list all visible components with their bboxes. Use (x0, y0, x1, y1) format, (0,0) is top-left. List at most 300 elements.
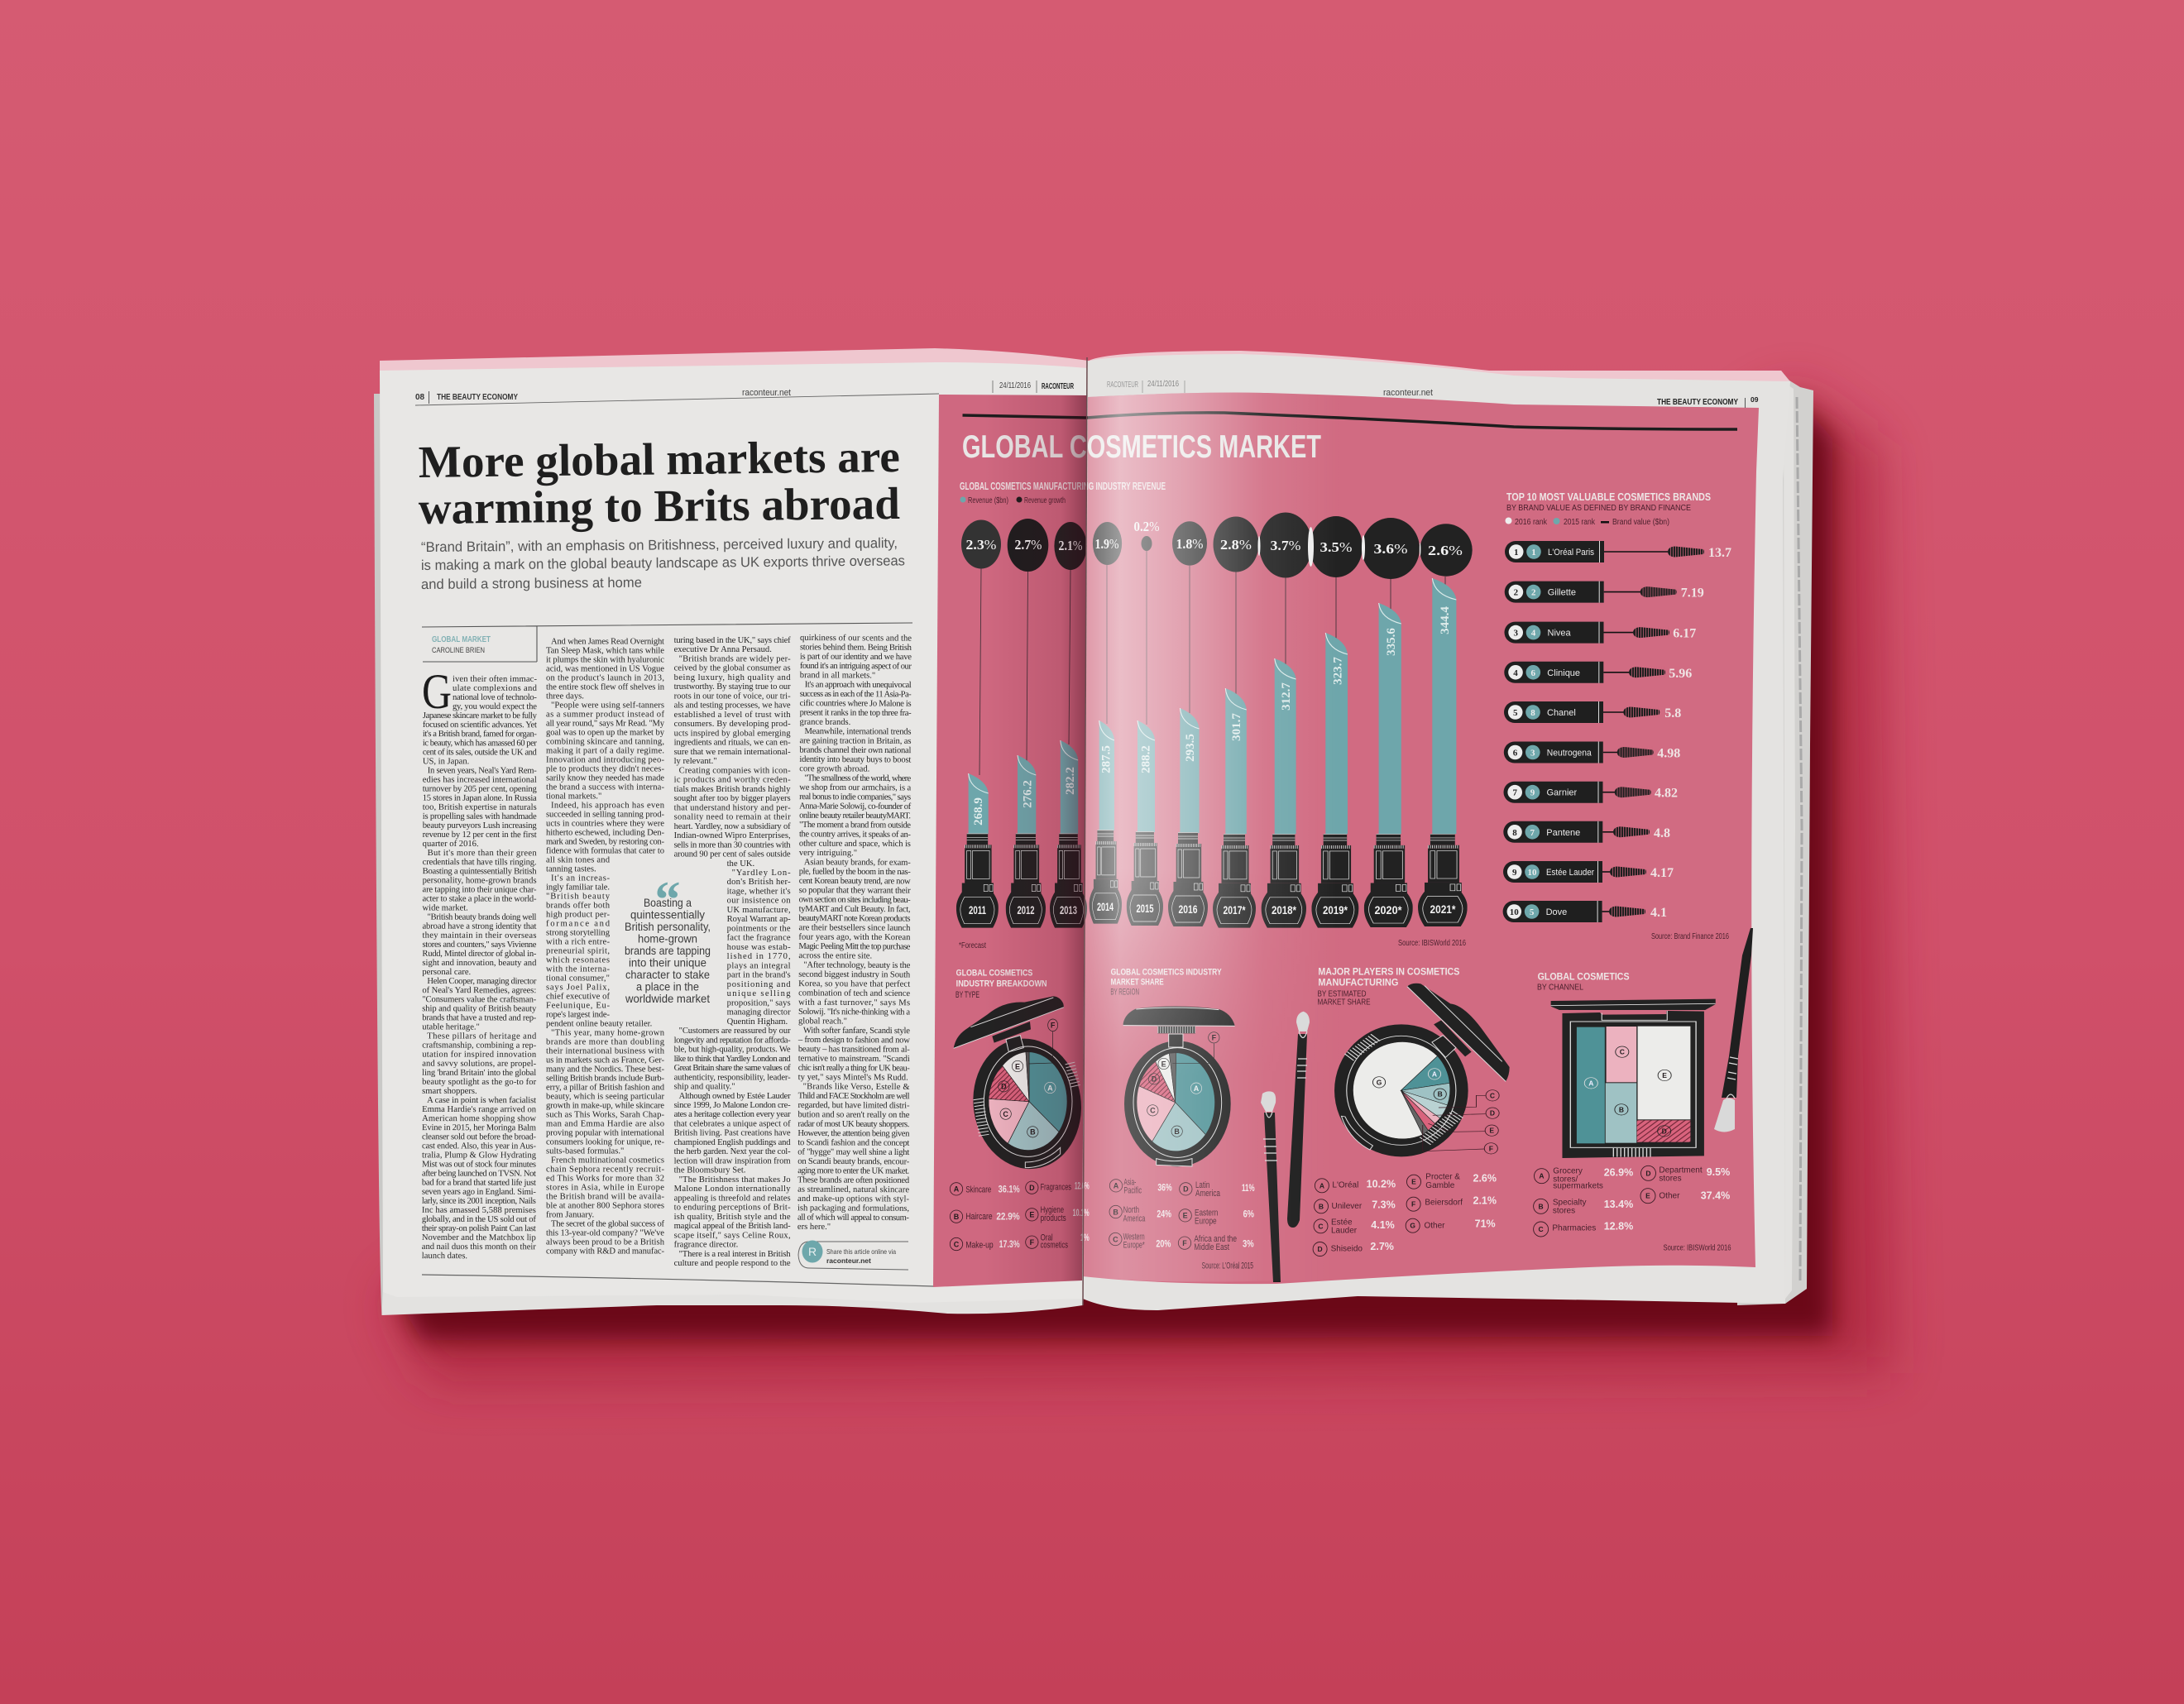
legend: Asia- (1123, 1178, 1137, 1188)
legend: D (1645, 1169, 1651, 1177)
article column 1 (422, 675, 538, 1261)
panel: major players in manufacturing: MAJOR PLAYERS IN COSMETICS (1318, 967, 1460, 977)
pull quote: “ (655, 872, 680, 928)
revenue values: 312.7 (1280, 682, 1293, 711)
article column 4: ternative to mainstream. "Scandi (798, 1054, 910, 1064)
article column 4: chic isn't really a thing for UK beau- (798, 1064, 910, 1073)
article column 2: beauty, which is seeing particular (546, 1093, 664, 1102)
article column 2: chain Sephora recently recruit- (546, 1166, 664, 1175)
article column 4: all of which will appeal to consum- (797, 1213, 909, 1223)
article column 3: magical appeal of the British land- (674, 1222, 791, 1231)
article column 2: Feelunique, Eu- (546, 1002, 610, 1011)
pull quote: a place in the (636, 979, 699, 993)
pull quote: into their unique (629, 956, 706, 969)
article column 3: British living. Past creations have (674, 1129, 791, 1138)
article column 2: sults-based formulas." (546, 1147, 624, 1156)
article column 1: is propelling sales with handmade (423, 812, 537, 821)
legend: 36% (1157, 1181, 1172, 1193)
article column 3: lection will draw inspiration from (674, 1156, 791, 1166)
legend: 4.1% (1371, 1219, 1395, 1231)
compact case (965, 1031, 1090, 1176)
right page pink infographic area (1083, 393, 1759, 1284)
article column 1: Boasting a quintessentially British (423, 867, 537, 876)
article column 1: "British beauty brands doing well (427, 913, 537, 922)
brand row 5 (1504, 701, 1681, 723)
left page header (415, 381, 1074, 405)
byline box: CAROLINE BRIEN (432, 646, 485, 655)
brand row 3: Nivea (1547, 629, 1572, 639)
panel: industry breakdown by type: D (1001, 1083, 1007, 1091)
article column 2: man and Emma Hardie are also (546, 1120, 664, 1129)
icon: fan brush at right margin (1714, 928, 1753, 1132)
article column 1: But it's more than their green (428, 849, 537, 858)
treemap letters: B (1619, 1105, 1624, 1113)
left page header: 08 (415, 393, 425, 402)
article column 1: edies has increased international (423, 775, 537, 785)
revenue values: 335.6 (1385, 628, 1398, 656)
legend: 17.3% (999, 1238, 1020, 1250)
growth values: 1.8% (1176, 536, 1203, 552)
article column 2: Indeed, his approach has even (551, 802, 665, 811)
legend: B (1319, 1202, 1324, 1210)
panel: industry breakdown by type: C (1003, 1110, 1008, 1118)
article column 1: beauty purveyors Lush increasing (423, 821, 537, 830)
legend: Europe* (1123, 1240, 1145, 1250)
article column 1: of Neal's Yard Remedies, agrees: (422, 986, 536, 995)
article column 2: company with R&D and manufac- (546, 1247, 664, 1256)
growth values: 2.1% (1059, 538, 1082, 553)
brand row 2: 2 (1514, 588, 1519, 598)
article column 2: which resonates (546, 956, 610, 965)
article column 2: "People were using self-tanners (551, 701, 664, 711)
legend (1313, 1172, 1497, 1256)
legend: 10.2% (1367, 1179, 1396, 1190)
revenue values: 301.7 (1230, 713, 1243, 741)
legend: D (1318, 1245, 1323, 1253)
article column 4: combination of tech and science (798, 988, 910, 998)
article column 1: cent of its sales, outside the UK and (423, 748, 538, 758)
page stack edge at right (1737, 371, 1813, 1305)
year labels: 2013 (1060, 903, 1077, 917)
article column 2: brands are more than doubling (546, 1038, 665, 1047)
pie and callout letters: F (1489, 1144, 1493, 1152)
share block: Share this article online via (826, 1247, 896, 1256)
growth values: 3.6% (1373, 541, 1408, 557)
article column 4: on Scandi beauty brands, encour- (797, 1157, 910, 1166)
article column 1: Inc has amassed 5,588 premises (422, 1206, 536, 1215)
brand row 8: Pantene (1546, 828, 1580, 838)
spine lighting on right page (1084, 392, 1309, 1282)
article column 4: "The moment a brand from outside (799, 821, 911, 830)
chart: lipstick bars with revenue growth balloons (956, 513, 1473, 928)
brand row 8: 7 (1530, 828, 1535, 838)
article column 2: as a summer product instead of (546, 711, 664, 720)
article column 2: succeeded in selling tanning prod- (546, 811, 664, 820)
legend: Pacific (1123, 1186, 1142, 1196)
article column 1: iven their often immac- (453, 675, 537, 684)
article column 4: – from design to fashion and now (797, 1036, 910, 1045)
article column 2: French multinational cosmetics (551, 1156, 664, 1166)
article column 3: positioning and (727, 980, 791, 989)
article column 3: Although owned by Estée Lauder (679, 1092, 791, 1101)
legend: 2.6% (1473, 1172, 1497, 1184)
article column 2: three days. (546, 692, 584, 701)
article column 1: American home shopping show (422, 1114, 536, 1123)
article column 1: it's a British brand, famed for organ- (423, 730, 537, 739)
legend: 22.9% (996, 1210, 1020, 1222)
chart footnotes (959, 939, 1466, 950)
brand row 10: Dove (1546, 907, 1567, 917)
panel: industry breakdown by type: INDUSTRY BREAKDOWN (956, 979, 1047, 989)
article column 3: sought after too by bigger players (674, 794, 791, 803)
pull quote: quintessentially (630, 908, 705, 921)
article column 2: consumers looking for unique, re- (546, 1138, 664, 1147)
article column 3: trustworthy. By staying true to our (674, 682, 791, 692)
article column 1: A case in point is when facialist (427, 1096, 536, 1105)
panel: market share by region: BY REGION (1110, 988, 1139, 998)
article column 4: ple, fuelled by the boom in the nas- (799, 867, 911, 877)
article column 1: Japanese skincare market to be fully (423, 711, 538, 720)
article column 3: house was estab- (727, 943, 791, 952)
brand row 10: 4.1 (1650, 906, 1667, 920)
brand row 7: 7 (1512, 788, 1517, 798)
year labels: 2018* (1272, 903, 1296, 917)
panel: major players in manufacturing: MANUFACTURING (1318, 979, 1398, 988)
article column 1: seven years ago in England. Simi- (422, 1188, 536, 1197)
legend: Pharmacies (1552, 1224, 1596, 1233)
legend: C (954, 1240, 960, 1248)
article column 4: global reach." (798, 1017, 847, 1027)
article column 4: and make-up options with styl- (797, 1194, 910, 1204)
article column 3: ly relevant." (674, 757, 717, 766)
brand row 4: 6 (1531, 668, 1536, 678)
growth balloons (961, 513, 1473, 579)
revenue values: 287.5 (1100, 745, 1114, 773)
legend: stores (1553, 1207, 1575, 1216)
article column 1: are tapping into their unique char- (423, 885, 537, 895)
article column 4: grance brands. (800, 718, 850, 727)
legend: Shiseido (1331, 1244, 1363, 1253)
panel: industry breakdown by type: E (1015, 1062, 1020, 1070)
brand row 4: 5.96 (1669, 667, 1692, 681)
article column 4: of "hygge" may well shine a light (797, 1147, 909, 1157)
legend: E (1029, 1211, 1034, 1219)
legend: C (1318, 1222, 1324, 1230)
right page header: 24/11/2016 (1147, 380, 1179, 389)
article column 2: hitherto eschewed, including Den- (546, 829, 664, 838)
article column 4: to Scandi fashion and the concept (797, 1138, 909, 1148)
article column 3: scape itself," says Celine Roux, (674, 1231, 791, 1240)
article column 3: ble, but high-quality, products. We (674, 1046, 791, 1055)
article column 1: personality, home-grown brands (423, 876, 537, 885)
article column 1: ling 'brand Britain' into the global (422, 1069, 536, 1078)
brand row 5: Chanel (1547, 708, 1576, 718)
brand row 1 (1505, 541, 1731, 562)
byline box: GLOBAL MARKET (432, 634, 491, 644)
article column 4: online beauty retailer beautyMART. (799, 811, 911, 821)
article column 2: acid, was mentioned in US Vogue (546, 665, 664, 674)
article column 4 (797, 634, 912, 1232)
pie and callout letters (1377, 1070, 1495, 1152)
brand row 6: 4.98 (1657, 746, 1680, 761)
article column 4: beauty – has transitioned from al- (798, 1045, 910, 1055)
article column 4: present it ranks in the top three fra- (800, 708, 912, 718)
palette treemap (1551, 999, 1716, 1158)
article column 2: stores in Asia, while in Europe (546, 1184, 664, 1193)
legend: supermarkets (1553, 1182, 1603, 1191)
brand row 1: 13.7 (1708, 546, 1731, 560)
article column 4: with a fast turnover," says Ms (798, 998, 910, 1008)
article column 2: making it part of a daily regime. (546, 747, 664, 756)
article column 3: ceived by the global consumer as (674, 664, 791, 673)
article column 2: And when James Read Overnight (551, 638, 664, 647)
right page header (1107, 380, 1759, 408)
pie and callout letters: B (1438, 1090, 1443, 1099)
revenue values: 268.9 (972, 797, 985, 826)
article column 2: brands offer both (546, 902, 611, 911)
brand row 8: 8 (1512, 828, 1517, 838)
brand row 6: Neutrogena (1547, 748, 1592, 758)
panel: market share by region: F (1212, 1034, 1217, 1042)
brand row 1: 1 (1531, 548, 1536, 558)
article column 3: "Yardley Lon- (732, 869, 791, 878)
revenue values: 293.5 (1184, 734, 1197, 762)
article column 3: the Bloomsbury Set. (674, 1166, 745, 1175)
growth values: 2.8% (1220, 537, 1252, 553)
article column 4: cent Korean beauty trend, are now (799, 877, 911, 886)
article column 2: formance and (546, 920, 611, 929)
treemap letters: A (1588, 1079, 1593, 1087)
article column 4: brand in all markets." (800, 671, 875, 681)
legend: A (1539, 1172, 1545, 1180)
revenue chart heading and legend: GLOBAL COSMETICS MANUFACTURING INDUSTRY REVENUE (960, 481, 1166, 492)
article column 3: als and testing processes, we have (674, 701, 791, 711)
share block (798, 1241, 908, 1270)
article column 3: "The Britishness that makes Jo (679, 1175, 791, 1185)
legend: North (1123, 1205, 1139, 1215)
article column 4: Solowij. "It's niche-thinking with a (798, 1008, 910, 1017)
article column 1: utation for inspired innovation (422, 1051, 537, 1060)
legend: B (954, 1213, 960, 1221)
year labels: 2019* (1323, 903, 1348, 917)
article column 1: revenue by 12 per cent in the first (423, 830, 537, 840)
year labels: 2012 (1018, 903, 1035, 917)
spine shadow on left page (984, 395, 1087, 1284)
article column 1: cleanser sold out before the broad- (422, 1132, 537, 1142)
left page pink infographic area (933, 395, 1087, 1287)
article column 1: US, in Japan. (423, 757, 469, 766)
legend (950, 1180, 1090, 1251)
year labels: 2011 (969, 903, 986, 917)
icon: make-up brush between panels (1261, 1091, 1281, 1282)
main title: GLOBAL COSMETICS MARKET (962, 429, 1321, 465)
article column 3: appealing is threefold and relates (674, 1194, 791, 1203)
article column 2: us in markets such as France, Ger- (546, 1056, 664, 1065)
pie letters (1147, 1032, 1219, 1137)
revenue chart heading and legend: Revenue ($bn) (968, 496, 1008, 505)
revenue values: 282.2 (1064, 767, 1077, 795)
article column 2: combining skincare and tanning, (546, 738, 664, 747)
compact and pie (1334, 984, 1510, 1156)
article column 2: The secret of the global success of (551, 1220, 664, 1229)
revenue values: 288.2 (1140, 745, 1153, 773)
growth values: 3.7% (1271, 538, 1300, 553)
article column 2: fidence with formulas that cater to (546, 847, 664, 856)
brand row 3 (1504, 622, 1696, 644)
article column 3: sonality need to remain at their (674, 813, 791, 822)
right page under-sheet strip (1089, 351, 1790, 389)
revenue values: 276.2 (1022, 780, 1035, 808)
legend: F (1182, 1239, 1187, 1247)
growth values: 2.7% (1014, 537, 1042, 553)
year labels: 2017* (1223, 903, 1246, 917)
panel: market share by region: A (1194, 1084, 1200, 1093)
pie chart (1137, 1053, 1215, 1151)
article column 1: turnover by 205 per cent, opening (423, 785, 537, 794)
panel: industry breakdown by type: B (1030, 1128, 1036, 1137)
brand row 4 (1504, 662, 1692, 683)
standfirst: is making a mark on the global beauty landscape as UK exports thrive overseas (421, 553, 905, 573)
brand row 7: 4.82 (1655, 787, 1678, 801)
chart footnotes: *Forecast (959, 941, 986, 950)
article column 2: mark and Sweden, by restoring con- (546, 838, 664, 847)
pull quote: Boasting a (644, 896, 692, 909)
pie chart (989, 1052, 1067, 1151)
revenue chart heading and legend (960, 481, 1166, 505)
article column 3: consumers. By developing prod- (674, 720, 791, 729)
article column 2: the brand a success with interna- (546, 783, 664, 792)
article column 2 (546, 638, 665, 1256)
pull quote: home-grown (638, 931, 697, 945)
legend: Oral (1041, 1233, 1053, 1242)
brand row 4: Clinique (1547, 668, 1580, 678)
article column 1: personal care. (422, 968, 471, 977)
article column 2: goal was to open up the market by (546, 729, 665, 738)
panel: market share by region: GLOBAL COSMETICS INDUSTRY (1111, 967, 1222, 977)
top 10 brands heading and legend: Brand value ($bn) (1612, 518, 1669, 527)
article column 4: is part of our identity and we have (800, 653, 912, 662)
pull quote: brands are tapping (625, 944, 711, 957)
legend: A (954, 1185, 960, 1194)
legend: L'Oréal (1332, 1181, 1358, 1190)
article column 1: utable heritage." (422, 1022, 480, 1031)
pie and callout letters: D (1490, 1109, 1495, 1118)
panel: market share by region: D (1152, 1075, 1157, 1084)
article column 3: fragrance director. (674, 1241, 738, 1250)
article column 3: "There is a real interest in British (679, 1250, 791, 1259)
share block: R (808, 1245, 817, 1258)
year labels: 2016 (1178, 902, 1198, 916)
article column 1: launch dates. (422, 1252, 467, 1261)
legend: 2.7% (1370, 1241, 1394, 1252)
compact lid (954, 996, 1064, 1048)
article column 3: "Customers are reassured by our (679, 1027, 791, 1036)
article column 1: "Consumers value the craftsman- (422, 995, 537, 1004)
article column 3: fact the fragrance (727, 934, 791, 943)
brand row 10: 5 (1530, 907, 1535, 917)
top 10 brands rows (1503, 541, 1731, 922)
article column 4: quirkiness of our scents and the (800, 634, 912, 644)
article column 4: Anna-Marie Solowij, co-founder of (799, 802, 912, 811)
article column 2: high product per- (546, 911, 610, 920)
right page header: THE BEAUTY ECONOMY (1657, 398, 1738, 407)
legend: Source: L'Oréal 2015 (1202, 1261, 1253, 1271)
brand row 6 (1504, 741, 1680, 763)
top rule across spread (963, 413, 1737, 429)
legend: Haircare (965, 1212, 993, 1222)
article column 3: lished in 1770, (727, 952, 791, 961)
brand row 6: 3 (1530, 748, 1535, 758)
article column 3: championed English puddings and (674, 1138, 791, 1147)
brand row 7: Garnier (1547, 788, 1578, 798)
article column 4: very intriguing." (799, 849, 857, 858)
article column 1: cast ended. Also, this year in Aus- (422, 1142, 536, 1151)
brand row 3: 3 (1513, 629, 1518, 639)
article column 3: that understand history and per- (674, 803, 791, 812)
growth values: 2.6% (1428, 543, 1463, 558)
article column 1: Rudd, Mintel director of global in- (422, 950, 537, 959)
share block: raconteur.net (826, 1256, 871, 1265)
revenue chart heading and legend: Revenue growth (1024, 496, 1066, 505)
article column 1: Helen Cooper, managing director (427, 977, 537, 986)
year labels: 2014 (1097, 900, 1114, 913)
panel: market share by region: C (1150, 1107, 1156, 1115)
brand row 5: 5.8 (1664, 706, 1681, 720)
revenue values: 344.4 (1439, 606, 1452, 634)
article column 3: authenticity, responsibility, leader- (674, 1073, 791, 1082)
article column 2: Innovation and introducing peo- (546, 756, 664, 765)
article column 3: sure that we remain international- (674, 748, 791, 757)
legend (1534, 1166, 1730, 1237)
legend: A (1320, 1181, 1324, 1189)
legend: Europe (1195, 1216, 1217, 1226)
right page header: raconteur.net (1383, 388, 1433, 398)
legend: Other (1425, 1221, 1445, 1230)
article column 1: abroad have a strong identity that (422, 922, 537, 931)
growth values: 0.2% (1133, 519, 1160, 534)
standfirst: and build a strong business at home (421, 575, 642, 592)
article column 2: It's an increas- (551, 874, 610, 883)
article column 3: ates a heritage collection every year (674, 1110, 791, 1119)
article column 2: on the product's launch in 2013, (546, 674, 664, 683)
left page header: raconteur.net (742, 388, 791, 398)
treemap letters: C (1620, 1048, 1625, 1056)
article column 1: These pillars of heritage and (427, 1031, 537, 1041)
article column 3: part in the brand's (727, 971, 791, 980)
brand row 10: 10 (1510, 907, 1519, 917)
article column 3: since 1999, Jo Malone London cre- (674, 1101, 791, 1110)
article column 4: Thild and FACE Stockholm are well (798, 1092, 910, 1101)
growth values: 2.3% (966, 537, 996, 553)
article column 2: ple to products they didn't neces- (546, 765, 664, 774)
brand row 6: 6 (1513, 748, 1518, 758)
legend: 11% (1242, 1182, 1255, 1194)
article column 1: ic beauty, which has amassed 60 per (423, 739, 537, 748)
article column 2: ingly familiar tale. (546, 883, 610, 893)
treemap letters: D (1662, 1127, 1667, 1135)
legend: 3% (1243, 1237, 1254, 1249)
article column 4: second biggest industry in South (798, 970, 911, 979)
article column 3: Great Britain share the same values of (674, 1064, 791, 1073)
article column 1: and nail duos this month on their (422, 1242, 536, 1252)
panel: global cosmetics by channel: BY CHANNEL (1537, 984, 1583, 993)
pie and callout letters: C (1490, 1091, 1495, 1099)
brand row 1: L'Oréal Paris (1548, 548, 1594, 558)
article column 2: tanning tastes. (546, 865, 596, 874)
article column 3: UK manufacture, (727, 906, 791, 915)
compact lid (1123, 1006, 1235, 1033)
article column 1: quarter of 2016. (423, 840, 479, 849)
